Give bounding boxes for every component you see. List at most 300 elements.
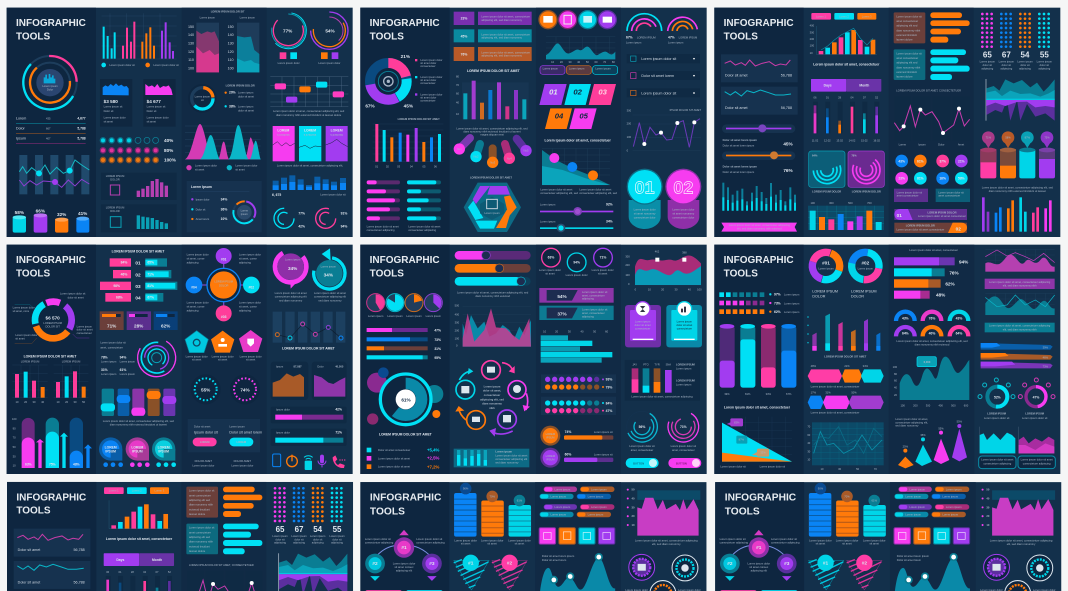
dot rating card 1: 79%: [606, 385, 612, 389]
bottom twin area charts: Lorem ipsum dolor sit amet: [981, 458, 1014, 462]
vertical bar chart: [373, 117, 443, 169]
cyan horizontal bars: diam nonummy nibh: [896, 65, 921, 69]
hex arrow rows: [808, 364, 884, 415]
capsule bars: 15:02: [861, 138, 868, 142]
data table: 435: [46, 117, 51, 121]
stacked area charts: [188, 10, 259, 72]
capsule bars: 11:02: [812, 138, 819, 142]
grid bar chart: 500: [848, 201, 853, 205]
tilted cylinders: [454, 126, 532, 168]
segmented donut: [364, 54, 442, 109]
multi-segment donuts: #01: [822, 261, 830, 266]
dot matrices: dolor sit: [313, 537, 323, 541]
hexagon diagram: Lorem ipsum: [484, 211, 500, 215]
numbered badges: sit amet nonummy: [634, 212, 656, 216]
segmented donut with callouts: Lorem ipsum dolor: [15, 333, 37, 337]
capsule bars with arrows: 75%: [49, 463, 56, 467]
wedge chart: 87%: [739, 438, 745, 442]
orange horizontal bars: adipiscing elit sed: [189, 498, 211, 502]
tagged grid chart: [270, 77, 348, 117]
dot matrices: 55: [333, 525, 342, 534]
arrow rings: [269, 245, 347, 302]
cyan horizontal bars: euismod tincidunt: [189, 544, 210, 548]
progress cards: 42%: [335, 408, 342, 412]
satellite rings: LOREM IPSUM: [1025, 411, 1045, 415]
progress bars: Lorem ipsum dolor sit amet: [367, 225, 399, 229]
donut with legend: 38%: [229, 104, 236, 108]
progress bars: consectetuer adipiscing: [367, 228, 395, 232]
dot rating card 2: 84%: [606, 401, 612, 405]
teal grid line chart: 10: [821, 467, 824, 471]
coloured line cards: LOREM: [277, 129, 290, 133]
dot matrices: Lorem ipsum: [999, 60, 1015, 64]
thin bar chart: [722, 183, 796, 211]
card with donut legend: [187, 181, 262, 232]
small ring stats: 77%: [298, 211, 305, 215]
branching node diagram: sit amet consec: [395, 565, 414, 569]
panel: infographic sheet 8, cropped: [715, 482, 1061, 591]
glass cylinders: 39%: [724, 392, 730, 396]
magenta area chart: 30: [632, 505, 635, 509]
title: [370, 255, 440, 279]
numbered tiles: 04: [555, 111, 564, 120]
teal area chart with tooltip: 500: [951, 404, 956, 408]
donut with legend: LOREM IPSUM DOLOR: [226, 84, 255, 88]
two grid bar charts: [12, 354, 88, 404]
sliders with percentages: 76%: [783, 168, 794, 173]
pentagon icons: Lorem ipsum dolor: [212, 354, 234, 358]
info cards with icons: consectetuer: [635, 327, 650, 331]
segmented donut with callouts: dolor sit amet: [77, 328, 93, 332]
action card: Lorem ipsum dolor: [192, 464, 214, 468]
data table: [16, 117, 86, 144]
tilted cylinders: diam nonummy nibh euismod tincidunt ut laoreet: [463, 129, 521, 133]
tilted cylinders: magna aliquam erat: [480, 132, 504, 136]
capsule bars: 13:02: [836, 138, 844, 142]
title: TOOLS: [16, 31, 51, 42]
tag pills: Lorem ipsum: [905, 494, 922, 498]
day month toggle: [104, 553, 174, 566]
cylinders: 58%: [15, 210, 25, 215]
radial gauges: 77%: [283, 28, 293, 33]
card with donut legend: Lorem: [241, 209, 249, 213]
glass cylinders: 81%: [745, 392, 751, 396]
small bar cards: DOLOR: [110, 209, 120, 213]
segmented bar chart: 60: [456, 92, 459, 96]
dot matrices: 65: [983, 51, 992, 60]
branching node diagram: sit amet consec: [749, 565, 769, 569]
line chart with bands: Amet: [958, 142, 964, 146]
grouped bar chart: Lorem ipsum dolor sit: [109, 63, 135, 67]
capsule bars: [812, 96, 881, 142]
numbered badges: 02: [673, 177, 693, 197]
numbered banners: Lorem ipsum dolor sit amet consectetuer: [918, 214, 966, 218]
descending chart with bubbles: consectetuer adipiscing elit, sed: [540, 191, 579, 195]
layered area chart with pins: 30: [675, 288, 678, 292]
segmented bar chart: LOREM IPSUM DOLOR SIT AMET: [467, 69, 520, 73]
magenta area chart: elit, sed diam nonummy: [652, 542, 681, 546]
stacked column card: [625, 360, 700, 401]
dot matrices: Lorem ipsum: [310, 534, 326, 538]
day month toggle: Month: [859, 84, 869, 88]
tilted cylinders: Lorem ipsum dolor sit amet, consectetuer adipiscing elit, sed: [456, 126, 528, 130]
teal line area chart: [985, 293, 1055, 332]
ring percentages: 71%: [600, 256, 606, 260]
tag pills: Lorem ipsum: [909, 505, 926, 509]
stacked layer columns: sit amet: [869, 541, 879, 545]
card with donut legend: ipsum: [241, 212, 249, 216]
badge progress: LOREM: [546, 454, 555, 458]
concentric progress: Lorem ipsum dolor sit: [671, 444, 696, 448]
dot matrices: 67: [295, 525, 304, 534]
percent rows: Lorem ipsum dolor sit amet, consectetuer: [481, 15, 530, 19]
day month toggle: [811, 79, 881, 92]
dot matrices: adipiscing: [1000, 66, 1013, 70]
square rating rows: 62%: [774, 310, 781, 314]
overlapping area chart: 200: [455, 328, 460, 332]
grid bar chart: 700: [867, 201, 872, 205]
mirrored percent bars: 65%: [147, 261, 154, 265]
teal peak chart: Dolor sit amet lorem ipsum: [897, 554, 930, 558]
icon tiles: [539, 528, 615, 544]
tag pills: Lorem ipsum: [942, 494, 959, 498]
magenta area chart: 10: [986, 523, 990, 527]
data table: 667: [46, 127, 51, 131]
cyan horizontal bars: amet consectetuer: [189, 530, 211, 534]
branching node diagram: consectetuer adipiscing: [416, 540, 445, 544]
mountain chart: Lorem ipsum dolor: [235, 163, 257, 167]
capsule bars: 14:02: [849, 138, 856, 142]
arrow rings: 34%: [324, 273, 334, 278]
sliders with percentages: [722, 124, 795, 174]
pentagon icons: sit amet: [192, 358, 202, 362]
pyramid chart: 55%: [957, 420, 963, 424]
hatched funnels: [809, 555, 882, 590]
concentric rings and stats: Lorem ipsum dolor sit: [100, 340, 126, 344]
segmented bar chart: 70: [456, 83, 459, 87]
progress bars: [367, 180, 441, 232]
layered area chart with pins: 20: [661, 288, 665, 292]
magenta area chart: 20: [986, 514, 990, 518]
tilted cylinders: No4: [507, 156, 512, 160]
layered area chart with pins: 388: [682, 250, 687, 254]
sliders with percentages: Dolor sit amet lorem ipsum: [723, 138, 758, 142]
stacked area charts: LOREM IPSUM DOLOR SIT: [211, 10, 245, 14]
magenta area chart: [627, 488, 700, 546]
stat cards: $4 677: [147, 99, 161, 104]
dot rating card 1: 93%: [606, 378, 612, 382]
segmented donut: consectetuer: [420, 64, 436, 68]
dot matrices: 67: [1002, 51, 1011, 60]
concentric rings and stats: Lorem ipsum: [101, 359, 117, 363]
hex arrow rows: Lorem ipsum dolor sit amet, consectetuer: [811, 411, 860, 415]
capsule bars, cropped: 06: [106, 570, 110, 574]
dot matrices: dolor sit: [1020, 63, 1030, 67]
concentric rings and stats: 78%: [101, 355, 108, 359]
teal area chart: 80: [612, 60, 615, 64]
info cards with icons: Lorem ipsum: [677, 319, 693, 323]
square rating rows: Lorem ipsum: [784, 293, 800, 297]
arc gauges: LOREM IPSUM: [679, 36, 697, 40]
segmented donut: sit amet dolor: [420, 78, 436, 82]
badge progress: IPSUM: [546, 435, 555, 439]
title: INFOGRAPHIC: [16, 492, 86, 503]
pyramid chart: [895, 417, 967, 468]
concentric rings and stats: 61%: [120, 368, 126, 372]
arc gauges: Lorem ipsum: [668, 40, 684, 44]
paired thin bars: [982, 197, 1052, 232]
small bar cards: LOREM IPSUM: [106, 206, 124, 210]
percent bubbles: 16%: [939, 177, 946, 181]
panel: infographic sheet 5: [360, 245, 707, 474]
stacked area charts: 110: [188, 58, 194, 62]
arrow rings: sed diam nonummy: [318, 298, 342, 302]
teal area chart: 70: [603, 60, 607, 64]
pin cylinders: 87%: [1025, 136, 1031, 140]
list rows: Lorem ipsum dolor sit: [641, 57, 676, 61]
hatched funnels: #1: [823, 561, 829, 567]
pin cylinders: 75%: [1044, 136, 1050, 140]
pie row: Lorem ipsum: [406, 314, 422, 318]
capsule bars: 04: [851, 96, 854, 100]
tilted cylinders: No2: [474, 155, 479, 159]
teal area chart: 40: [577, 60, 581, 64]
stepped horizontal bars: Lorem ipsum dolor sit amet, consectetuer: [909, 248, 958, 252]
progress bars: consectetuer adipiscing: [408, 228, 437, 232]
capsule bars, cropped: 28: [131, 570, 134, 574]
stat cards: Dolor sit: [104, 109, 114, 113]
percentage tiles: 28%: [134, 323, 144, 328]
two grid bar charts: LOREM IPSUM DOLOR SIT AMET: [24, 354, 76, 358]
stepped horizontal bars: 62%: [945, 281, 956, 286]
layered area chart with pins: 40: [688, 288, 691, 292]
badge progress: Lorem ipsum sit: [594, 430, 613, 434]
panel: infographic sheet 6: [714, 245, 1060, 474]
panel: infographic sheet 2: [360, 8, 707, 237]
cyan horizontal bars: euismod tincidunt: [896, 70, 917, 74]
magenta area chart: 50: [632, 488, 635, 492]
overlapping area chart: [455, 304, 531, 348]
stacked area charts: 120: [228, 50, 234, 54]
percent banners: adipiscing: [582, 314, 594, 318]
orange horizontal bars: diam nonummy nibh: [896, 28, 921, 32]
percent banners: 54%: [557, 294, 568, 299]
segmented donut with callouts: Lorem ipsum: [77, 324, 93, 328]
teal info bar: sed diam nonummy: [495, 460, 519, 464]
card with donut legend: 34%: [221, 197, 227, 201]
circular process: [455, 361, 530, 437]
title: INFOGRAPHIC: [370, 493, 442, 504]
hatched funnels: #1: [468, 561, 474, 567]
tag pills: Lorem ipsum: [909, 487, 926, 491]
vertical knob sliders: diam nonummy nibh euismod tincidunt ut laoreet: [110, 423, 167, 427]
vertical bar chart: 02: [386, 165, 389, 169]
numbered banners: 01: [897, 213, 902, 218]
branching node diagram: adipiscing elit: [751, 568, 767, 572]
pyramid chart: 35%: [920, 433, 926, 437]
orange horizontal bars: euismod tincidunt: [189, 507, 210, 511]
hex arrow rows: 34%: [863, 364, 869, 368]
dot matrices: 55: [1040, 51, 1049, 60]
sliders with percentages: 45%: [783, 141, 794, 146]
capsule bars with arrows: 10: [13, 464, 16, 468]
cyan horizontal bars: laoreet dolore: [896, 75, 913, 79]
segmented donut with callouts: consectetuer: [77, 331, 92, 335]
purple line chart: IPSUM DOLOR SIT AMET: [670, 108, 701, 112]
stacked layer columns: Lorem ipsum dolor: [508, 538, 531, 542]
pyramid chart: Lorem ipsum dolor sit amet,: [895, 417, 928, 421]
title: [725, 493, 797, 517]
stacked column card: Lorem ipsum: [676, 367, 692, 371]
two grid bar charts: 40: [41, 400, 45, 404]
panel: infographic sheet 4: [7, 245, 353, 474]
sparkline cards: 56,788: [781, 74, 792, 78]
half gauges: 43%: [956, 316, 962, 320]
numbered tiles: 02: [573, 87, 583, 96]
outlined pills: Lorem ipsum: [595, 66, 611, 70]
data table: 407: [46, 137, 51, 141]
outlined pills: Lorem ipsum: [569, 66, 585, 70]
gear icons: [625, 554, 701, 591]
percent banners: Lorem ipsum dolor sit: [582, 308, 608, 312]
segmented donut: 45%: [404, 103, 414, 108]
stacked layer columns: 90%: [463, 487, 469, 491]
day month toggle: Days: [116, 558, 124, 562]
ring tiles: LOREM IPSUM DOLOR: [812, 190, 841, 194]
glass cylinders: [720, 324, 796, 396]
legend pills: [104, 487, 169, 494]
hub and spoke diagram: adipiscing: [239, 308, 251, 312]
numbered tiles: 05: [579, 111, 589, 120]
dot rows: 80%: [164, 148, 174, 153]
buttons: BUTTON: [676, 461, 687, 465]
dot matrices: adipiscing: [312, 541, 324, 545]
change legend: +2,5%: [427, 456, 440, 461]
branching node diagram: Lorem ipsum dolor: [748, 562, 770, 566]
pie row: Lorem ipsum: [426, 314, 442, 318]
segmented bar chart: 10: [456, 112, 459, 116]
data table: Ipsum: [16, 137, 26, 141]
purple line chart: 300: [627, 109, 632, 113]
horizontal progress: 47%: [434, 329, 441, 333]
stacked layer columns: sit amet: [816, 541, 825, 545]
info cards with icons: [625, 302, 702, 347]
badge progress: IPSUM: [546, 457, 555, 461]
tag pills: Lorem ipsum: [591, 487, 607, 491]
title: [370, 493, 442, 517]
grid bar chart: 300: [829, 201, 834, 205]
pin cylinders: diam nonummy nibh euismod tincidunt ut laoreet: [989, 189, 1046, 193]
small ring stats: 42%: [298, 225, 305, 229]
concentric progress: Lorem ipsum dolor sit: [629, 444, 655, 448]
hex arrow rows: 50%: [851, 390, 857, 394]
branching node diagram: adipiscing elit: [396, 568, 412, 572]
pill sliders: Lorem ipsum dolor sit amet, consectetuer adipiscing elit, sed: [457, 291, 529, 295]
pentagon icons: sit amet: [246, 358, 256, 362]
hub and spoke diagram: #02: [249, 286, 254, 290]
3D ribbons: 39%: [1043, 346, 1049, 350]
percent banners: 37%: [557, 311, 568, 316]
numbered badges: consectetuer dolor: [672, 216, 694, 220]
area cards: 87,887: [294, 365, 302, 369]
coloured line cards: LOREM: [331, 129, 343, 133]
hub and spoke diagram: adipiscing: [187, 260, 199, 264]
stacked layer columns: 61%: [872, 499, 878, 503]
data table: Lorem: [16, 117, 26, 121]
area cards: 40,505: [335, 365, 344, 369]
capsule bars: 12:02: [824, 138, 831, 142]
title: INFOGRAPHIC: [724, 18, 794, 29]
dot matrices: [980, 13, 1053, 70]
ring tiles: LOREM IPSUM DOLOR: [852, 190, 881, 194]
cyan horizontal bars: laoreet dolore: [189, 549, 206, 553]
percent bubbles: 21%: [958, 159, 965, 163]
teal grid line chart: 30: [838, 467, 842, 471]
ring percentages: Lorem ipsum dolor: [566, 273, 588, 277]
combo bar chart: 10: [810, 51, 813, 55]
combo bar chart: 400: [810, 24, 815, 28]
mirrored percent bars: 02: [135, 272, 141, 277]
dot matrices: Lorem ipsum: [329, 534, 345, 538]
combo bar chart: [810, 24, 880, 67]
stacked area charts: Lorem ipsum: [240, 15, 256, 19]
info cards with icons: consectetuer: [677, 327, 692, 331]
segmented bar chart: 80: [456, 74, 459, 78]
ribbon banner: Lorem ipsum dolor sit amet, consectetuer adipiscing: [729, 223, 790, 227]
teal info bar: [454, 449, 529, 467]
title: [16, 492, 86, 517]
change legend: Lorem ipsum dolor sit amet: [378, 456, 410, 460]
legend pills: [811, 13, 876, 20]
magenta line area chart: Lorem ipsum dolor sit amet, consectetuer adipiscing: [989, 280, 1051, 284]
multi-segment donuts: Lorem ipsum: [858, 266, 874, 270]
percent banners: amet, consectetuer: [582, 293, 605, 297]
branching node diagram: #2: [372, 561, 378, 567]
magenta line area chart: [985, 249, 1055, 289]
circular process: consectetuer: [484, 393, 500, 397]
tag pills: Lorem ipsum: [550, 494, 567, 498]
orange horizontal bars: laoreet dolore: [896, 38, 913, 42]
vertical knob sliders: Lorem ipsum dolor sit amet, consectetuer adipiscing elit, sed: [103, 419, 174, 423]
badge progress: 60%: [565, 452, 571, 456]
grid bar chart: 100: [810, 201, 815, 205]
teal line area chart: Lorem ipsum dolor sit amet, consectetuer adipiscing: [989, 324, 1051, 328]
text boxes: [894, 189, 970, 202]
hexagon diagram: [464, 176, 521, 232]
day month toggle: Month: [152, 558, 162, 562]
progress cards: Ipsum dolor: [276, 431, 290, 435]
title: [724, 255, 794, 279]
layered area chart with pins: 10: [648, 288, 651, 292]
mirrored percent bars: 46%: [121, 272, 127, 276]
card with donut legend: Amet lorem: [196, 217, 210, 221]
hub and spoke diagram: sit amet, conse: [187, 256, 205, 260]
two grid bar charts: 10: [16, 400, 19, 404]
percent rows: 76%: [461, 52, 467, 56]
percent banners: Lorem ipsum dolor sit: [582, 290, 608, 294]
pin badges with dots: IPSUM: [105, 449, 116, 453]
dotted progress rings: 55%: [201, 387, 211, 392]
mountain chart: sit amet: [195, 167, 205, 171]
branching node diagram: Lorem ipsum dolor sit: [720, 537, 746, 541]
blue bar chart: 6, 675: [272, 193, 281, 197]
mirrored percent bars: 67%: [147, 295, 154, 299]
line chart with bands: Dolor: [938, 142, 945, 146]
stepped horizontal bars: 48%: [936, 293, 946, 298]
segmented donut with callouts: sit amet: [15, 336, 25, 340]
branching node diagram: Lorem ipsum dolor: [393, 562, 415, 566]
combo bar chart: [106, 500, 173, 541]
